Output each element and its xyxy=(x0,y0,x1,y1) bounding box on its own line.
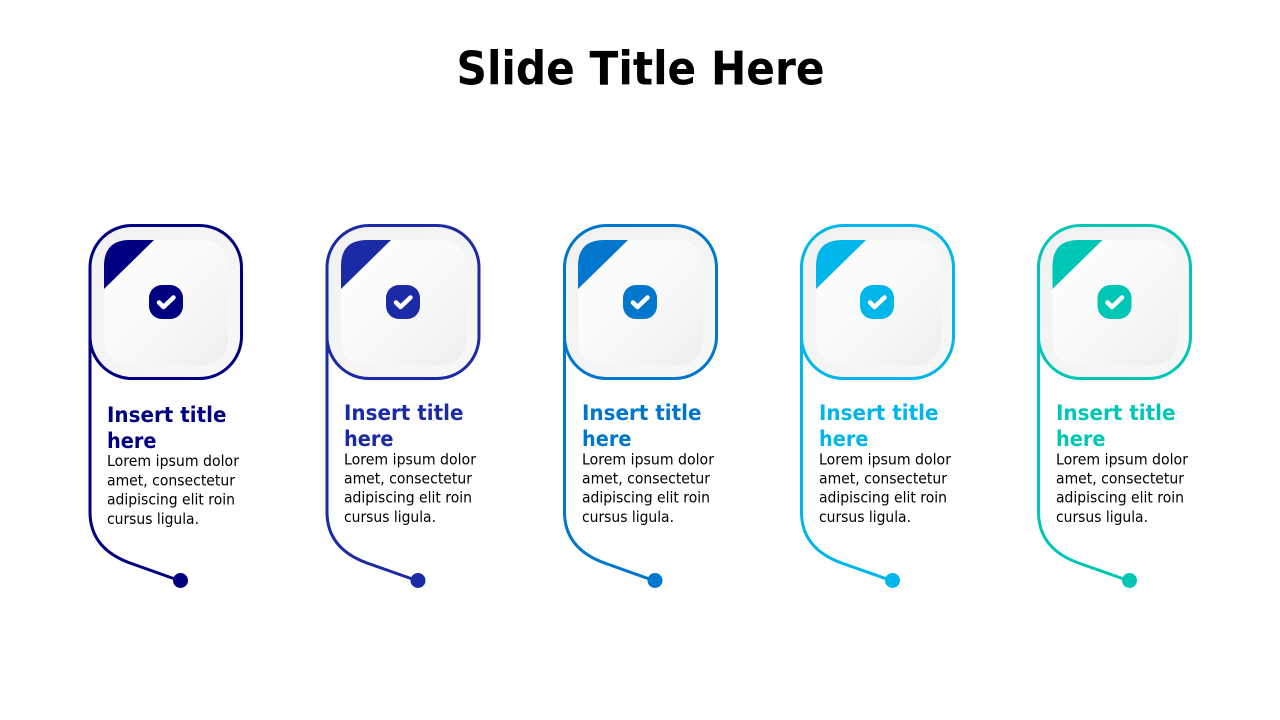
item description: adipiscing elit roin xyxy=(582,488,710,506)
item description: cursus ligula. xyxy=(1056,508,1148,526)
item description: cursus ligula. xyxy=(107,510,199,528)
item heading: here xyxy=(344,427,394,451)
panel: item 3 xyxy=(564,226,716,588)
item description: cursus ligula. xyxy=(344,508,436,526)
item heading: here xyxy=(582,427,632,451)
card xyxy=(90,226,242,378)
panel: item 4 xyxy=(802,226,954,588)
icon: check badge xyxy=(149,285,183,319)
card xyxy=(1038,226,1190,378)
corner accent xyxy=(816,240,866,289)
item description: Lorem ipsum dolor xyxy=(344,450,477,468)
connector line with end dot xyxy=(1038,336,1137,588)
icon: check badge xyxy=(1098,285,1132,319)
connector line with end dot xyxy=(327,336,426,588)
item heading: here xyxy=(1056,427,1106,451)
item description: adipiscing elit roin xyxy=(344,488,472,506)
item description: adipiscing elit roin xyxy=(819,488,947,506)
item heading: here xyxy=(819,427,868,451)
connector line with end dot xyxy=(802,336,900,588)
card xyxy=(327,226,479,378)
title: Slide Title Here xyxy=(456,42,824,96)
item heading: here xyxy=(107,429,156,453)
icon: check badge xyxy=(386,285,420,319)
icon: check badge xyxy=(860,285,894,319)
corner accent xyxy=(578,240,628,289)
item heading: Insert title xyxy=(582,401,702,425)
panel: item 2 xyxy=(327,226,479,588)
item description: Lorem ipsum dolor xyxy=(582,450,715,468)
connector line with end dot xyxy=(90,336,188,588)
card xyxy=(802,226,954,378)
card xyxy=(564,226,716,378)
item description: cursus ligula. xyxy=(819,508,911,526)
item description: adipiscing elit roin xyxy=(1056,488,1184,506)
item description: amet, consectetur xyxy=(344,470,473,488)
item description: amet, consectetur xyxy=(819,470,948,488)
item heading: Insert title xyxy=(344,401,464,425)
item description: Lorem ipsum dolor xyxy=(107,452,240,470)
item description: adipiscing elit roin xyxy=(107,490,235,508)
connector line with end dot xyxy=(564,336,662,588)
item description: amet, consectetur xyxy=(582,470,711,488)
item heading: Insert title xyxy=(1056,401,1176,425)
corner accent xyxy=(341,240,391,289)
item heading: Insert title xyxy=(819,401,938,425)
corner accent xyxy=(1052,240,1102,289)
item heading: Insert title xyxy=(107,403,226,427)
icon: check badge xyxy=(623,285,657,319)
corner accent xyxy=(104,240,154,289)
panel: item 5 xyxy=(1038,226,1190,588)
item description: Lorem ipsum dolor xyxy=(1056,450,1189,468)
item description: Lorem ipsum dolor xyxy=(819,450,952,468)
item description: amet, consectetur xyxy=(1056,470,1185,488)
item description: cursus ligula. xyxy=(582,508,674,526)
panel: item 1 xyxy=(90,226,242,588)
item description: amet, consectetur xyxy=(107,472,236,490)
